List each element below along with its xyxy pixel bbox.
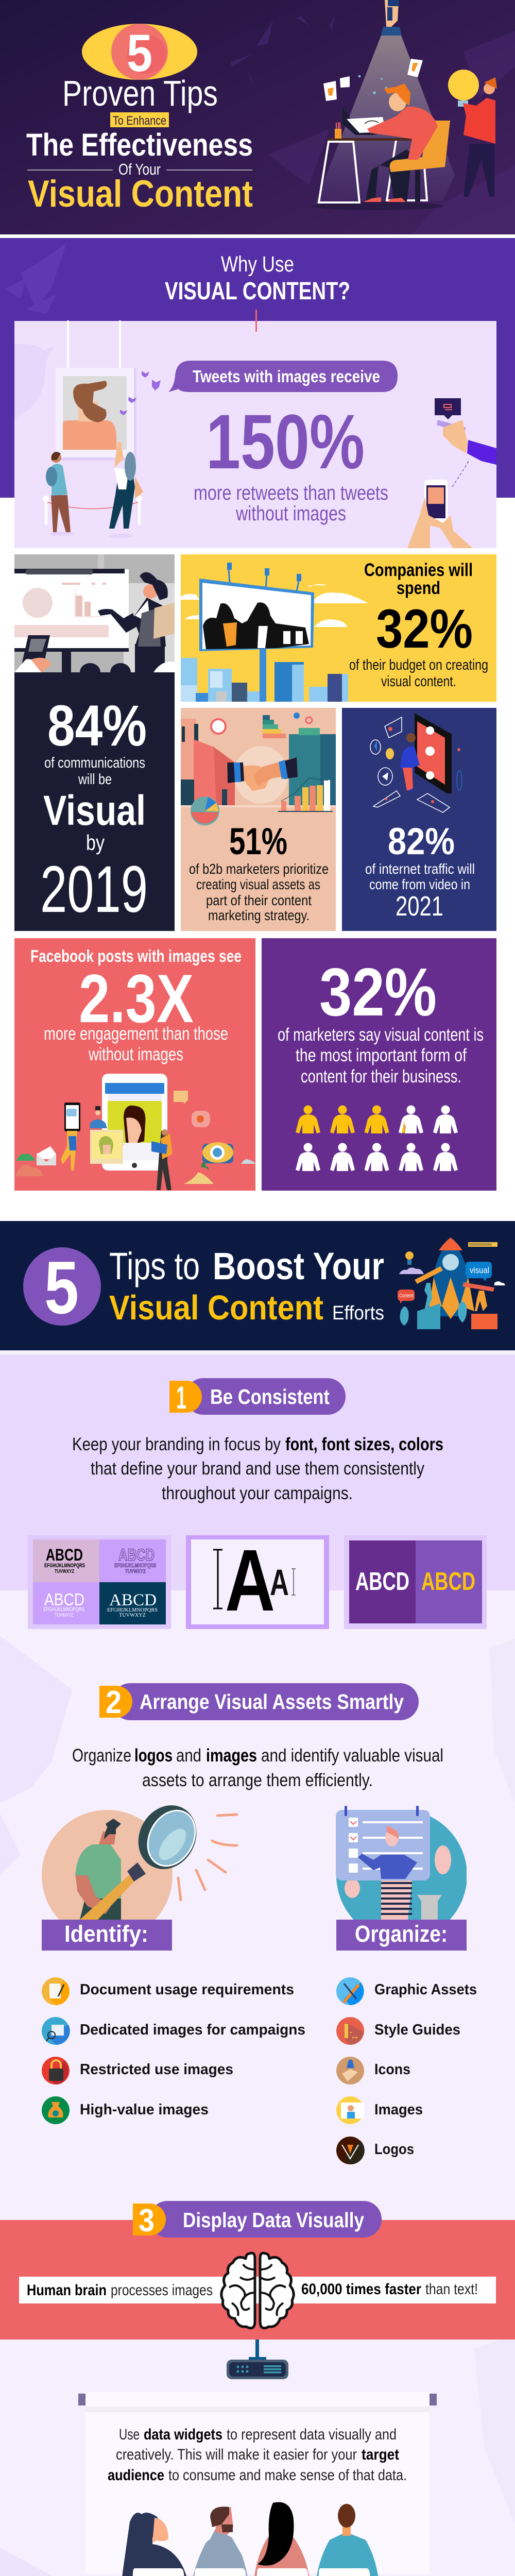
band: brain fact: 60,000 times faster bbox=[301, 2281, 421, 2298]
title: The Effectiveness bbox=[26, 127, 253, 162]
heading: tips to boost: Tips to bbox=[109, 1245, 200, 1287]
heading badge: display data visually: 3 bbox=[139, 2203, 154, 2239]
text: data widgets: creatively. This will make it easier for your bbox=[116, 2446, 357, 2463]
text: more retweets: without images bbox=[235, 502, 346, 525]
illustration: gallery viewers bbox=[43, 320, 161, 538]
band: brain fact bbox=[0, 2220, 515, 2340]
speech bubble: tweets with images receive bbox=[168, 361, 398, 392]
panel: 84% of communications bbox=[14, 554, 175, 931]
text: organize logos and images bbox=[72, 1745, 443, 1790]
band: brain fact: Human brain bbox=[27, 2282, 107, 2299]
heading badge: be consistent: Be Consistent bbox=[210, 1385, 330, 1409]
illustration: rocket team: Content bbox=[399, 1293, 414, 1299]
illustration: handshake and business charts bbox=[181, 713, 336, 825]
panel: tweets with images bbox=[14, 310, 496, 548]
text: organize logos and images: images bbox=[206, 1745, 257, 1766]
panel: internet traffic 82% bbox=[342, 708, 496, 931]
text: data widgets: target bbox=[362, 2446, 399, 2463]
list item: graphic assets: Graphic Assets bbox=[374, 1981, 477, 1998]
text: organize logos and images: assets to arrange them efficiently. bbox=[142, 1770, 373, 1790]
heading badge: be consistent: 1 bbox=[176, 1380, 186, 1416]
stat text: 82%: of internet traffic will bbox=[365, 861, 475, 877]
stat text: 32% budget bbox=[349, 560, 488, 690]
text: organize logos and images: and bbox=[176, 1745, 201, 1766]
section: tip 1 be consistent bbox=[28, 1378, 487, 1630]
list item: logos: Logos bbox=[374, 2141, 414, 2158]
list item: images bbox=[336, 2096, 423, 2124]
panel: tips heading band bbox=[0, 1221, 515, 1350]
card: font samples: EFGHIJKLMNOPQRS bbox=[43, 1606, 84, 1613]
stat text: 51% bbox=[189, 821, 329, 923]
card: font size: A bbox=[225, 1532, 275, 1630]
stat text: 51%: of b2b marketers prioritize bbox=[189, 861, 329, 877]
heading badge: be consistent bbox=[169, 1378, 346, 1416]
stat text: 82%: 2021 bbox=[396, 891, 443, 922]
text: data widgets: audience bbox=[108, 2467, 164, 2484]
card: color samples: ABCD bbox=[421, 1568, 475, 1596]
stat text: 32% budget: 32% bbox=[376, 598, 473, 659]
stat text: 84%: will be bbox=[78, 771, 112, 788]
list: identify items bbox=[42, 1977, 305, 2124]
text: organize logos and images: logos bbox=[134, 1745, 173, 1766]
card: font samples: ABCD bbox=[109, 1591, 157, 1609]
pictogram: 32 percent people bbox=[296, 1106, 458, 1171]
text: data widgets: to represent data visually and bbox=[227, 2426, 397, 2443]
stat text: 32% of marketers: the most important form of bbox=[296, 1045, 467, 1065]
heading: tips to boost bbox=[109, 1245, 384, 1327]
stat text: 32% of marketers bbox=[278, 954, 484, 1087]
illustration: identify magnifier man bbox=[42, 1805, 238, 1920]
panel: companies will spend bbox=[180, 554, 496, 702]
list item: restricted use images: Restricted use images bbox=[80, 2061, 233, 2078]
list item: style guides bbox=[336, 2017, 460, 2045]
illustration: presenter at whiteboard bbox=[14, 554, 175, 682]
list item: logos bbox=[336, 2137, 414, 2164]
stat text: 32% of marketers: 32% bbox=[319, 954, 437, 1030]
stat text: 84% bbox=[40, 693, 148, 926]
list: organize items bbox=[336, 1977, 477, 2164]
big stat: 150%: 150% bbox=[206, 398, 365, 485]
tag: identify: Identify: bbox=[64, 1921, 148, 1947]
stat text: 2.3X bbox=[30, 946, 242, 1064]
icon: five badge: 5 bbox=[127, 24, 152, 82]
icon: number five circle bbox=[23, 1246, 101, 1329]
stat text: 84%: 84% bbox=[47, 693, 147, 758]
illustration: audience on bench bbox=[107, 2502, 400, 2576]
illustration: organize checklist man bbox=[336, 1806, 467, 1920]
card: font samples: TUVWXYZ bbox=[125, 1569, 146, 1574]
list item: document usage requirements: Document usage requirements bbox=[80, 1981, 294, 1998]
card: font samples: TUVWXYZ bbox=[55, 1613, 73, 1618]
illustration: phone with video and viewer bbox=[370, 713, 462, 812]
stat text: 2.3X: more engagement than those bbox=[44, 1024, 228, 1044]
list item: icons: Icons bbox=[374, 2061, 410, 2078]
heading: why use visual content: Why Use bbox=[221, 252, 294, 277]
illustration: social media phone bbox=[15, 1074, 255, 1190]
stat text: 51%: 51% bbox=[229, 821, 287, 862]
stat text: 32% budget: visual content. bbox=[381, 673, 456, 690]
tag: organize bbox=[336, 1920, 467, 1951]
list item: icons bbox=[336, 2057, 410, 2084]
text: data widgets: data widgets bbox=[144, 2426, 222, 2443]
speech bubble: tweets with images receive: Tweets with images receive bbox=[193, 367, 380, 386]
text: data widgets bbox=[108, 2426, 407, 2484]
stat text: 84%: Visual bbox=[43, 787, 146, 834]
band: brain fact: processes images bbox=[111, 2282, 213, 2299]
card: font samples: TUVWXYZ bbox=[55, 1569, 74, 1574]
card: font size bbox=[186, 1532, 329, 1630]
panel: hero header bbox=[0, 0, 515, 234]
text: branding focus: font, font sizes, colors bbox=[285, 1434, 443, 1454]
stat text: 32% budget: Companies will bbox=[364, 560, 473, 580]
card: font samples: EFGHIJKLMNOPQRS bbox=[114, 1563, 156, 1569]
illustration: billboard and city bbox=[180, 563, 368, 702]
icon: projector bbox=[227, 2340, 288, 2379]
card: font samples: ABCD bbox=[46, 1546, 83, 1564]
list item: high-value images bbox=[42, 2096, 209, 2124]
text: branding focus: throughout your campaigns. bbox=[162, 1483, 353, 1503]
section: tip 2 arrange visual assets bbox=[42, 1683, 477, 2164]
card: font samples bbox=[28, 1535, 171, 1629]
stat text: 2.3X: without images bbox=[88, 1044, 183, 1064]
title: Proven Tips bbox=[62, 73, 218, 113]
heading badge: display data visually: Display Data Visually bbox=[183, 2208, 364, 2232]
list item: images: Images bbox=[374, 2102, 423, 2118]
stat text: 84%: of communications bbox=[44, 755, 145, 771]
text: more retweets bbox=[194, 482, 388, 525]
heading badge: display data visually bbox=[133, 2201, 382, 2239]
illustration: rocket team: visual bbox=[470, 1265, 489, 1275]
panel: marketers say visual content bbox=[262, 938, 496, 1191]
stat text: 82% bbox=[365, 821, 475, 922]
stat text: 84%: by bbox=[86, 831, 105, 855]
heading: tips to boost: Visual Content bbox=[109, 1289, 323, 1327]
list item: restricted use images bbox=[42, 2057, 233, 2084]
text: branding focus: that define your brand and use them consistently bbox=[91, 1459, 424, 1479]
text: more retweets: more retweets than tweets bbox=[194, 482, 388, 504]
card: font samples: TUVWXYZ bbox=[119, 1613, 146, 1618]
stat text: 51%: creating visual assets as bbox=[196, 876, 320, 892]
title: Visual Content bbox=[28, 173, 253, 215]
stat text: 32% of marketers: content for their business. bbox=[301, 1066, 461, 1087]
text: branding focus: Keep your branding in focus by bbox=[72, 1434, 281, 1454]
card: color samples bbox=[344, 1535, 487, 1629]
title: To Enhance bbox=[113, 114, 166, 128]
stat text: 32% budget: spend bbox=[397, 578, 440, 598]
tag: identify bbox=[42, 1920, 172, 1951]
stat text: 84%: 2019 bbox=[40, 853, 148, 926]
panel: b2b marketers 51% bbox=[181, 708, 336, 931]
heading: tips to boost: Efforts bbox=[332, 1302, 384, 1324]
stat text: 51%: marketing strategy. bbox=[208, 907, 310, 923]
illustration: phones and retweet hands bbox=[407, 398, 496, 548]
stat text: 82%: come from video in bbox=[369, 876, 470, 892]
list item: dedicated images: Dedicated images for campaigns bbox=[80, 2022, 305, 2038]
heading badge: arrange visual assets: Arrange Visual Assets Smartly bbox=[140, 1690, 404, 1714]
heading badge: arrange visual assets: 2 bbox=[106, 1685, 122, 1720]
section: tip 3 display data bbox=[0, 2201, 515, 2576]
icon: brain bbox=[221, 2253, 294, 2328]
text: organize logos and images: and identify valuable visual bbox=[261, 1745, 443, 1766]
projection screen with text bbox=[78, 2392, 437, 2574]
list item: document usage requirements bbox=[42, 1977, 294, 2005]
illustration: designer under spotlight bbox=[312, 0, 497, 210]
text: data widgets: to consume and make sense of that data. bbox=[168, 2467, 407, 2484]
stat text: 51%: part of their content bbox=[206, 892, 312, 908]
card: font samples: EFGHIJKLMNOPQRS bbox=[107, 1607, 158, 1613]
panel: facebook posts bbox=[14, 938, 255, 1191]
heading: why use visual content: VISUAL CONTENT? bbox=[165, 278, 350, 305]
panel: why use section background bbox=[0, 238, 515, 498]
stat text: 2.3X: 2.3X bbox=[79, 961, 194, 1037]
card: color samples: ABCD bbox=[355, 1568, 409, 1596]
tag: organize: Organize: bbox=[355, 1921, 448, 1947]
panel: tips body background bbox=[0, 1350, 515, 2576]
title bbox=[26, 73, 253, 215]
band: brain fact: than text! bbox=[425, 2281, 478, 2298]
list item: dedicated images bbox=[42, 2017, 305, 2045]
heading badge: arrange visual assets bbox=[99, 1683, 419, 1720]
text: branding focus bbox=[72, 1434, 443, 1503]
card: font samples: ABCD bbox=[44, 1590, 84, 1609]
stat text: 82%: 82% bbox=[388, 821, 455, 862]
card: font size: A bbox=[270, 1563, 289, 1603]
card: font samples: ABCD bbox=[118, 1546, 154, 1564]
list item: style guides: Style Guides bbox=[374, 2022, 460, 2038]
heading: why use visual content bbox=[165, 252, 350, 305]
list item: high-value images: High-value images bbox=[80, 2102, 209, 2118]
text: data widgets: Use bbox=[119, 2426, 140, 2443]
title: Of Your bbox=[118, 160, 161, 178]
card: font samples: EFGHIJKLMNOPQRS bbox=[44, 1563, 85, 1569]
heading: tips to boost: Boost Your bbox=[213, 1245, 384, 1287]
illustration: rocket team bbox=[398, 1238, 505, 1329]
icon: number five circle: 5 bbox=[44, 1246, 79, 1329]
icon: five badge bbox=[82, 24, 197, 82]
stat text: 2.3X: Facebook posts with images see bbox=[30, 946, 242, 965]
list item: graphic assets bbox=[336, 1977, 477, 2005]
text: organize logos and images: Organize bbox=[72, 1745, 131, 1766]
